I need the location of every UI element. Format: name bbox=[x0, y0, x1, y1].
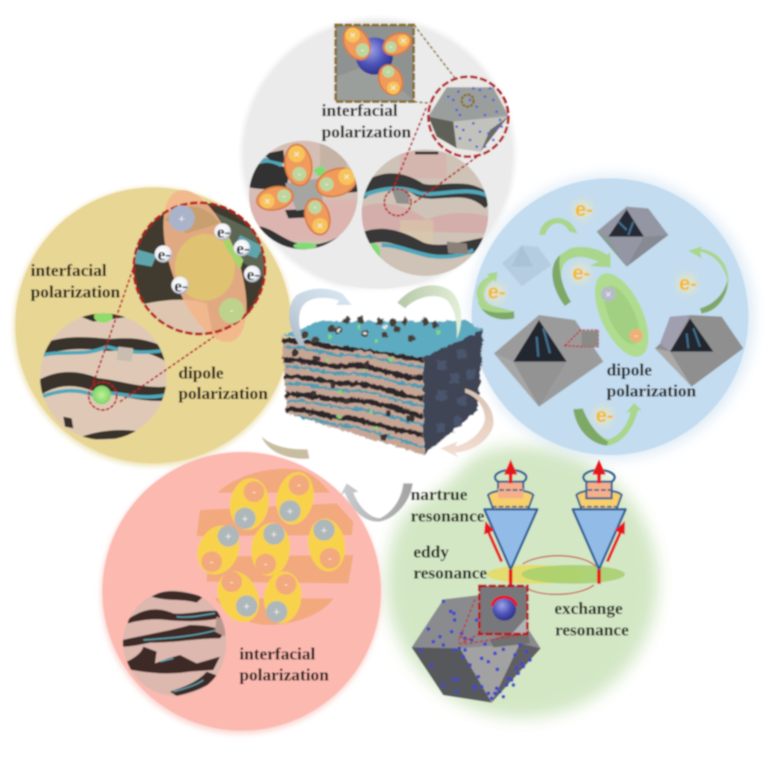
inset: magnified site: - bbox=[361, 44, 365, 56]
flake with dipoles: - bbox=[264, 559, 268, 571]
lower-right micro section bbox=[360, 148, 492, 278]
flake with dipoles: - bbox=[230, 576, 234, 588]
panel: interfacial polarization (pink) bbox=[102, 452, 381, 731]
callout: magnified dipole with electrons: - bbox=[230, 305, 234, 317]
flake with dipoles: + bbox=[321, 525, 328, 537]
lower-left micro section with dipoles: - bbox=[297, 168, 301, 180]
cycle arrows bbox=[476, 218, 728, 446]
spin cone right bbox=[573, 459, 626, 584]
electrons: e- bbox=[596, 405, 614, 427]
spin cone left bbox=[484, 459, 537, 585]
callout: magnified dipole with electrons: e- bbox=[236, 239, 250, 258]
dipole ellipse: × bbox=[605, 289, 612, 301]
labels: polarization bbox=[31, 282, 121, 301]
callout: magnified dipole with electrons: e- bbox=[158, 245, 171, 264]
inset: magnified site: - bbox=[389, 41, 393, 53]
top face bbox=[283, 320, 483, 357]
labels bbox=[31, 261, 268, 403]
labels: polarization bbox=[178, 384, 268, 403]
lower-left micro section with dipoles: - bbox=[325, 179, 329, 191]
arrow: tan bbox=[262, 437, 309, 459]
lower-left micro section with dipoles: × bbox=[317, 221, 323, 233]
ghost polyhedron bbox=[502, 245, 552, 287]
right face bbox=[423, 323, 483, 455]
label: dipole polarization: dipole bbox=[607, 361, 652, 380]
flake with dipoles: + bbox=[287, 506, 294, 518]
label: dipole polarization: polarization bbox=[607, 382, 697, 401]
polyhedron right bbox=[655, 315, 743, 387]
flake with dipoles: - bbox=[210, 556, 214, 568]
callout lines bbox=[93, 258, 250, 402]
cycle arrows around the block bbox=[262, 285, 493, 522]
flake with dipoles: + bbox=[243, 601, 250, 613]
labels: resonance types: exchange bbox=[554, 599, 623, 618]
label: interfacial polarization: polarization bbox=[322, 122, 412, 141]
front face layers bbox=[280, 333, 425, 457]
panel: dipole polarization (blue) bbox=[472, 178, 748, 455]
flake with dipoles: - bbox=[252, 486, 256, 498]
callout: magnified dipole with electrons bbox=[132, 189, 268, 342]
arrow: blue-grey bbox=[289, 289, 352, 346]
arrow: grey-green bbox=[397, 285, 461, 339]
arrow: grey bbox=[341, 483, 413, 522]
flake with dipoles: + bbox=[271, 529, 278, 541]
flake with dipoles: - bbox=[284, 579, 288, 591]
electrons bbox=[485, 199, 697, 427]
lower-left micro section with dipoles bbox=[247, 140, 360, 253]
inset: magnified site: × bbox=[390, 83, 397, 95]
flake with dipoles: - bbox=[328, 553, 332, 565]
lower-left micro section with dipoles: × bbox=[343, 172, 350, 184]
inset: magnified atom bbox=[479, 586, 527, 634]
labels: resonance types: resonance bbox=[413, 563, 487, 582]
inset: magnified site bbox=[336, 22, 415, 102]
micro section image bbox=[120, 587, 230, 700]
labels: resonance types: resonance bbox=[555, 620, 629, 639]
lower-left micro section with dipoles: × bbox=[264, 196, 271, 208]
electrons: e- bbox=[572, 262, 590, 284]
callout: magnified dipole with electrons: + bbox=[178, 213, 185, 225]
label: interfacial polarization bbox=[239, 644, 329, 685]
callout: magnified polyhedron bbox=[384, 77, 508, 216]
labels: resonance types: nartrue bbox=[411, 485, 468, 504]
panel: interfacial polarization (grey) bbox=[244, 21, 512, 289]
flake with dipoles: - bbox=[297, 480, 301, 492]
lower-left micro section with dipoles: - bbox=[282, 190, 286, 202]
panel: polarization (tan) bbox=[15, 179, 291, 463]
polyhedron large bbox=[494, 315, 603, 407]
flake with dipoles: + bbox=[273, 607, 280, 619]
central layered composite block bbox=[280, 320, 483, 457]
arrow: peach bbox=[441, 388, 493, 457]
lower-left micro section with dipoles: - bbox=[313, 202, 317, 214]
callout lines bbox=[393, 25, 482, 203]
label: interfacial polarization: interfacial bbox=[322, 101, 398, 120]
flake with dipoles: + bbox=[225, 531, 232, 543]
orbit plane ellipses bbox=[487, 556, 625, 594]
label: dipole polarization bbox=[607, 361, 697, 401]
callout: magnified dipole with electrons: e- bbox=[217, 223, 231, 242]
label: interfacial polarization: interfacial bbox=[239, 644, 316, 663]
labels: interfacial bbox=[31, 261, 107, 280]
callout: magnified dipole with electrons: e- bbox=[174, 276, 188, 295]
inset: magnified site: × bbox=[349, 30, 356, 42]
polyhedron with atoms bbox=[412, 595, 541, 703]
panel: magnetic resonance (green) bbox=[411, 459, 629, 703]
labels: resonance types bbox=[411, 485, 629, 639]
inset: magnified site: × bbox=[400, 35, 407, 47]
labels: resonance types: resonance bbox=[411, 507, 485, 526]
electrons: e- bbox=[488, 282, 506, 304]
dipole ellipse bbox=[584, 265, 659, 365]
label: interfacial polarization bbox=[322, 101, 412, 141]
callout: magnified dipole with electrons: e- bbox=[247, 265, 260, 284]
dipole ellipse: - bbox=[634, 330, 638, 342]
electrons: e- bbox=[679, 273, 697, 295]
flake with dipoles: + bbox=[242, 513, 249, 525]
polyhedron top bbox=[597, 207, 668, 267]
flake with dipoles bbox=[189, 468, 353, 629]
labels: resonance types: eddy bbox=[413, 542, 449, 561]
label: interfacial polarization: polarization bbox=[239, 666, 329, 685]
electrons: e- bbox=[575, 199, 593, 221]
lower-left micro section with dipoles: × bbox=[293, 149, 300, 161]
labels: dipole bbox=[178, 363, 224, 382]
micro section with dipole site bbox=[37, 311, 170, 443]
inset: magnified site: - bbox=[386, 66, 390, 78]
